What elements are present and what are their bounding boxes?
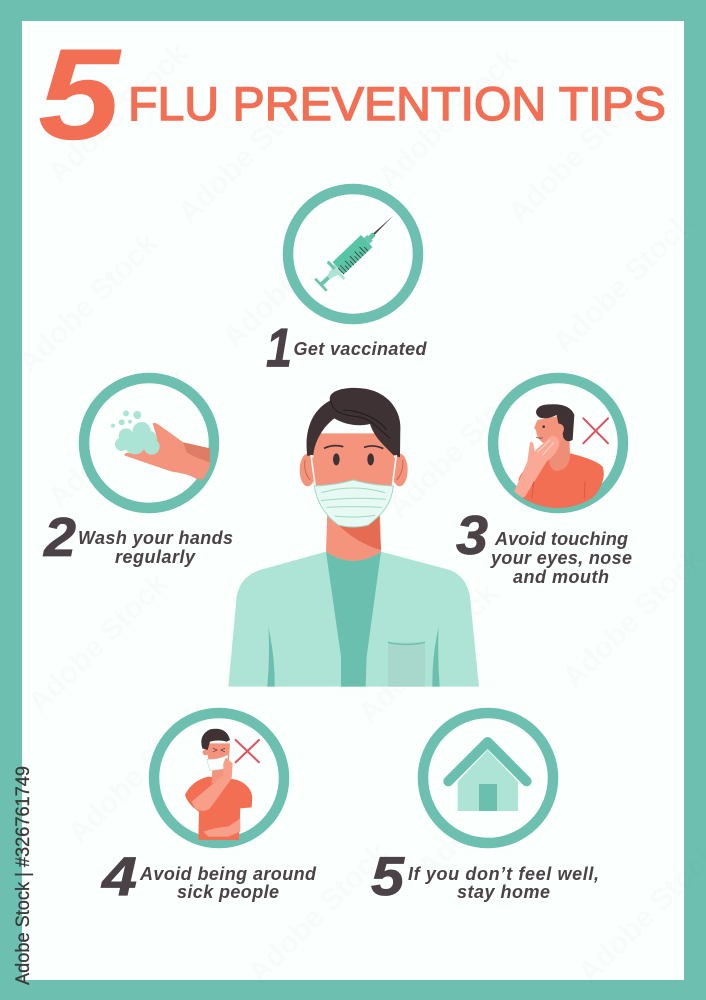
hair [307,388,400,457]
tip 2 label: Wash your hands [78,528,233,548]
tip 4 label: Avoid being around [139,864,317,884]
title number 5: 5 [38,21,122,167]
watermark pattern: Adobe Stock [172,77,325,230]
watermark pattern: Adobe Stock [217,532,370,685]
icon: house [448,742,527,811]
shirt [326,552,381,687]
watermark pattern: Adobe Stock [372,42,525,195]
watermark pattern: Adobe Stock [22,567,175,720]
jacket seams [267,627,440,687]
watermark pattern: Adobe Stock [412,732,565,885]
tip 5 label second line: stay home [457,882,550,902]
foam [111,410,160,455]
neck [326,512,381,561]
watermark pattern: Adobe Stock [42,362,195,515]
jacket [228,552,479,687]
central man with mask [228,388,479,687]
tip 5: stay home icon [423,713,553,843]
ear details [305,460,403,480]
watermark pattern: Adobe Stock [242,837,395,990]
ears [300,454,408,486]
tip 4 label second line: sick people [177,882,279,902]
watermark pattern: Adobe Stock [557,542,706,695]
watermark pattern: Adobe Stock [42,37,195,190]
tip 3: avoid touching face icon [493,378,623,508]
face mask [314,480,393,527]
icon: soapy hand [111,410,210,480]
red cross [583,418,608,443]
stock credit: Adobe Stock | #326761749 [13,766,34,985]
tip 4: sick people icon [154,713,284,843]
tip 2: hand washing icon [84,378,214,508]
icon: syringe [312,207,402,294]
watermark pattern: Adobe Stock [62,697,215,850]
watermark pattern: Adobe Stock [217,202,370,355]
watermark pattern: Adobe Stock [382,372,535,525]
icon: man touching face [513,404,608,508]
tip 3 label third line: and mouth [513,567,609,587]
mask pleats [321,488,386,517]
neck shadow [337,513,381,550]
tip 5 label: If you don’t feel well, [408,864,599,884]
red cross [236,740,259,762]
tip 3 number: 3 [456,504,488,566]
hair lines [331,400,390,438]
tip 3 label: Avoid touching [494,529,628,549]
tip 2 number: 2 [43,506,76,568]
watermark pattern: Adobe Stock [502,77,655,230]
tip 1 number: 1 [266,316,292,378]
tip 2 label second line: regularly [115,547,196,567]
tip 3 label second line: your eyes, nose [490,548,632,568]
pocket [388,642,425,687]
watermark pattern: Adobe Stock [352,577,505,730]
watermark pattern: Adobe Stock [12,227,165,380]
tip 5 number: 5 [371,845,406,907]
eyebrows [324,446,383,449]
tip 4 number: 4 [101,845,137,907]
icon: coughing man [185,729,259,840]
tip 1: vaccination icon [288,189,418,319]
face [313,433,394,507]
eyes [333,453,374,465]
tip 1 label: Get vaccinated [294,339,428,359]
mask straps [311,455,396,487]
title: FLU PREVENTION TIPS [128,77,666,130]
watermark pattern: Adobe Stock [547,207,700,360]
